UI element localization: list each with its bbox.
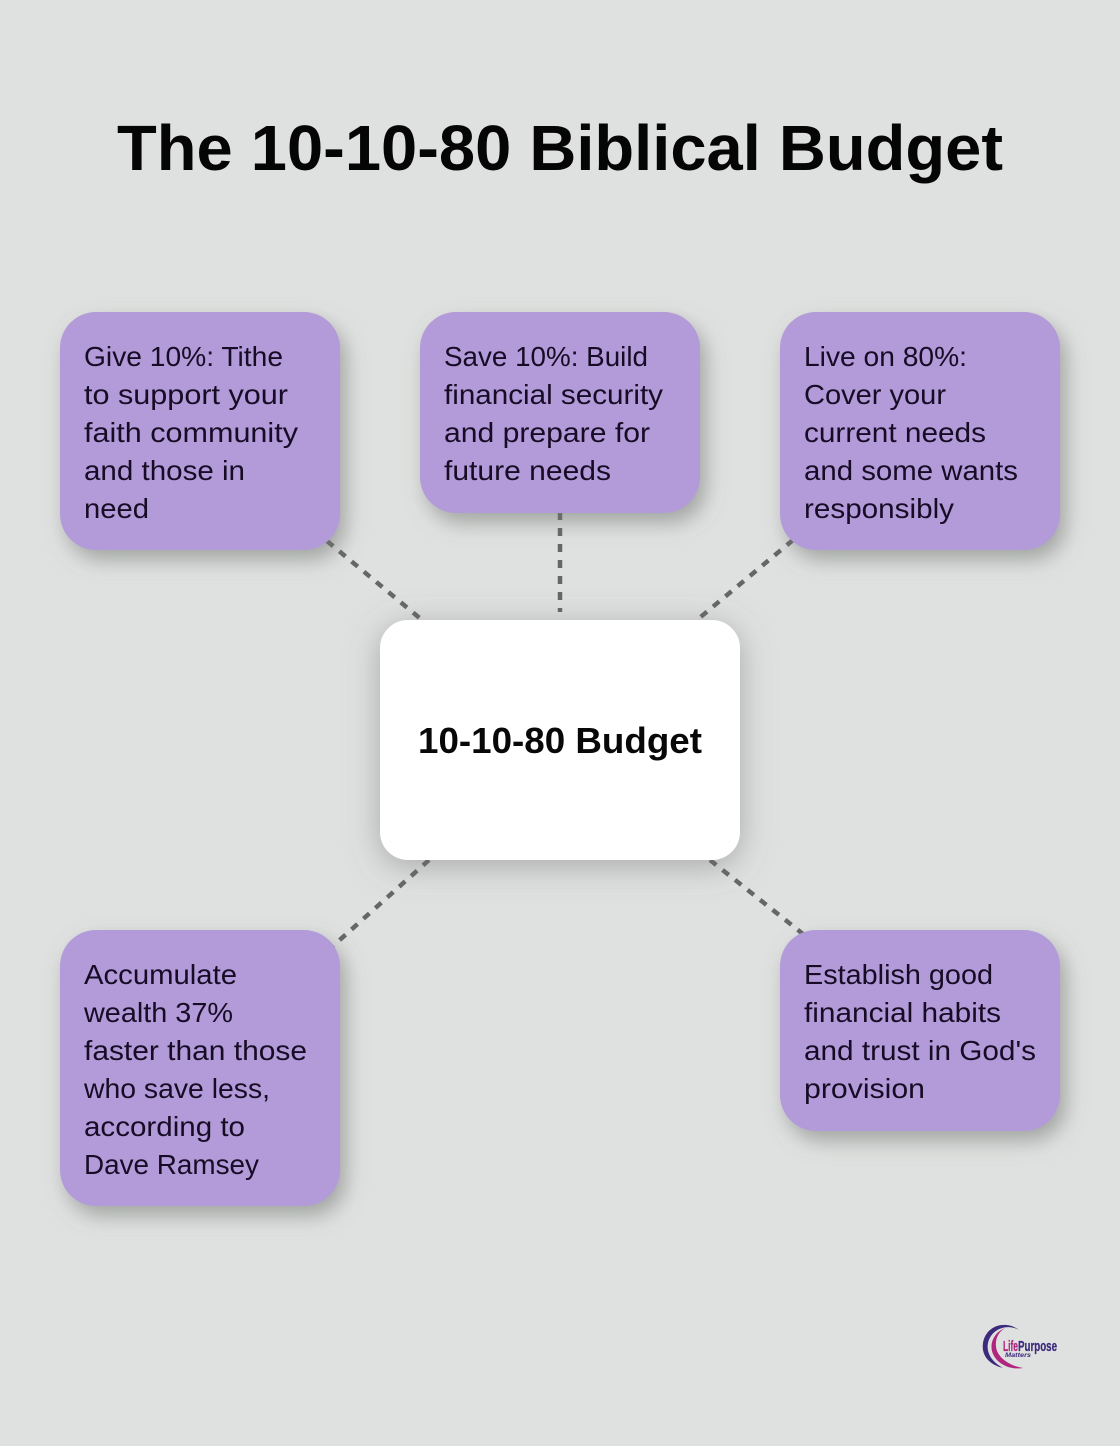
- panel: establish habits: provision: [804, 1073, 925, 1104]
- panel: accumulate wealth: who save less,: [83, 1073, 270, 1104]
- logo: Purpose: [1018, 1338, 1057, 1355]
- panel: give 10%: [60, 312, 340, 550]
- panel: give 10%: and those in: [84, 455, 245, 486]
- panel: live on 80%: and some wants: [804, 455, 1018, 486]
- connector: live to center: [697, 540, 793, 620]
- panel: save 10%: Save 10%: Build: [444, 341, 648, 372]
- connector: save to center: [558, 512, 562, 612]
- connector: establish to center: [710, 860, 803, 934]
- panel: accumulate wealth: [60, 930, 340, 1206]
- panel: center budget: 10-10-80 Budget: [418, 720, 702, 761]
- panel: save 10%: financial security: [444, 379, 663, 410]
- panel: live on 80%: current needs: [804, 417, 986, 448]
- logo: Matters: [1005, 1353, 1032, 1359]
- panel: give 10%: need: [84, 493, 149, 524]
- panel: give 10%: Give 10%: Tithe: [84, 341, 283, 372]
- panel: give 10%: to support your: [84, 379, 288, 410]
- panel: accumulate wealth: wealth 37%: [83, 997, 233, 1028]
- panel: save 10%: and prepare for: [444, 417, 650, 448]
- panel: save 10%: future needs: [444, 455, 611, 486]
- logo: [983, 1325, 1057, 1368]
- panel: establish habits: [780, 930, 1060, 1131]
- title: The 10-10-80 Biblical Budget: [117, 112, 1003, 184]
- panel: center budget: [380, 620, 740, 860]
- panel: accumulate wealth: Accumulate: [84, 959, 237, 990]
- panel: live on 80%: [780, 312, 1060, 550]
- panel: live on 80%: Live on 80%:: [804, 341, 967, 372]
- connector: accumulate to center: [333, 860, 429, 946]
- connector: give to center: [327, 541, 422, 620]
- logo: Life: [1003, 1338, 1018, 1355]
- panel: accumulate wealth: Dave Ramsey: [84, 1149, 259, 1180]
- panel: give 10%: faith community: [84, 417, 298, 448]
- panel: live on 80%: responsibly: [804, 493, 954, 524]
- panel: establish habits: and trust in God's: [804, 1035, 1036, 1066]
- panel: establish habits: financial habits: [804, 997, 1001, 1028]
- panel: accumulate wealth: faster than those: [84, 1035, 307, 1066]
- panel: accumulate wealth: according to: [84, 1111, 245, 1142]
- panel: establish habits: Establish good: [804, 959, 993, 990]
- panel: live on 80%: Cover your: [804, 379, 946, 410]
- panel: save 10%: [420, 312, 700, 513]
